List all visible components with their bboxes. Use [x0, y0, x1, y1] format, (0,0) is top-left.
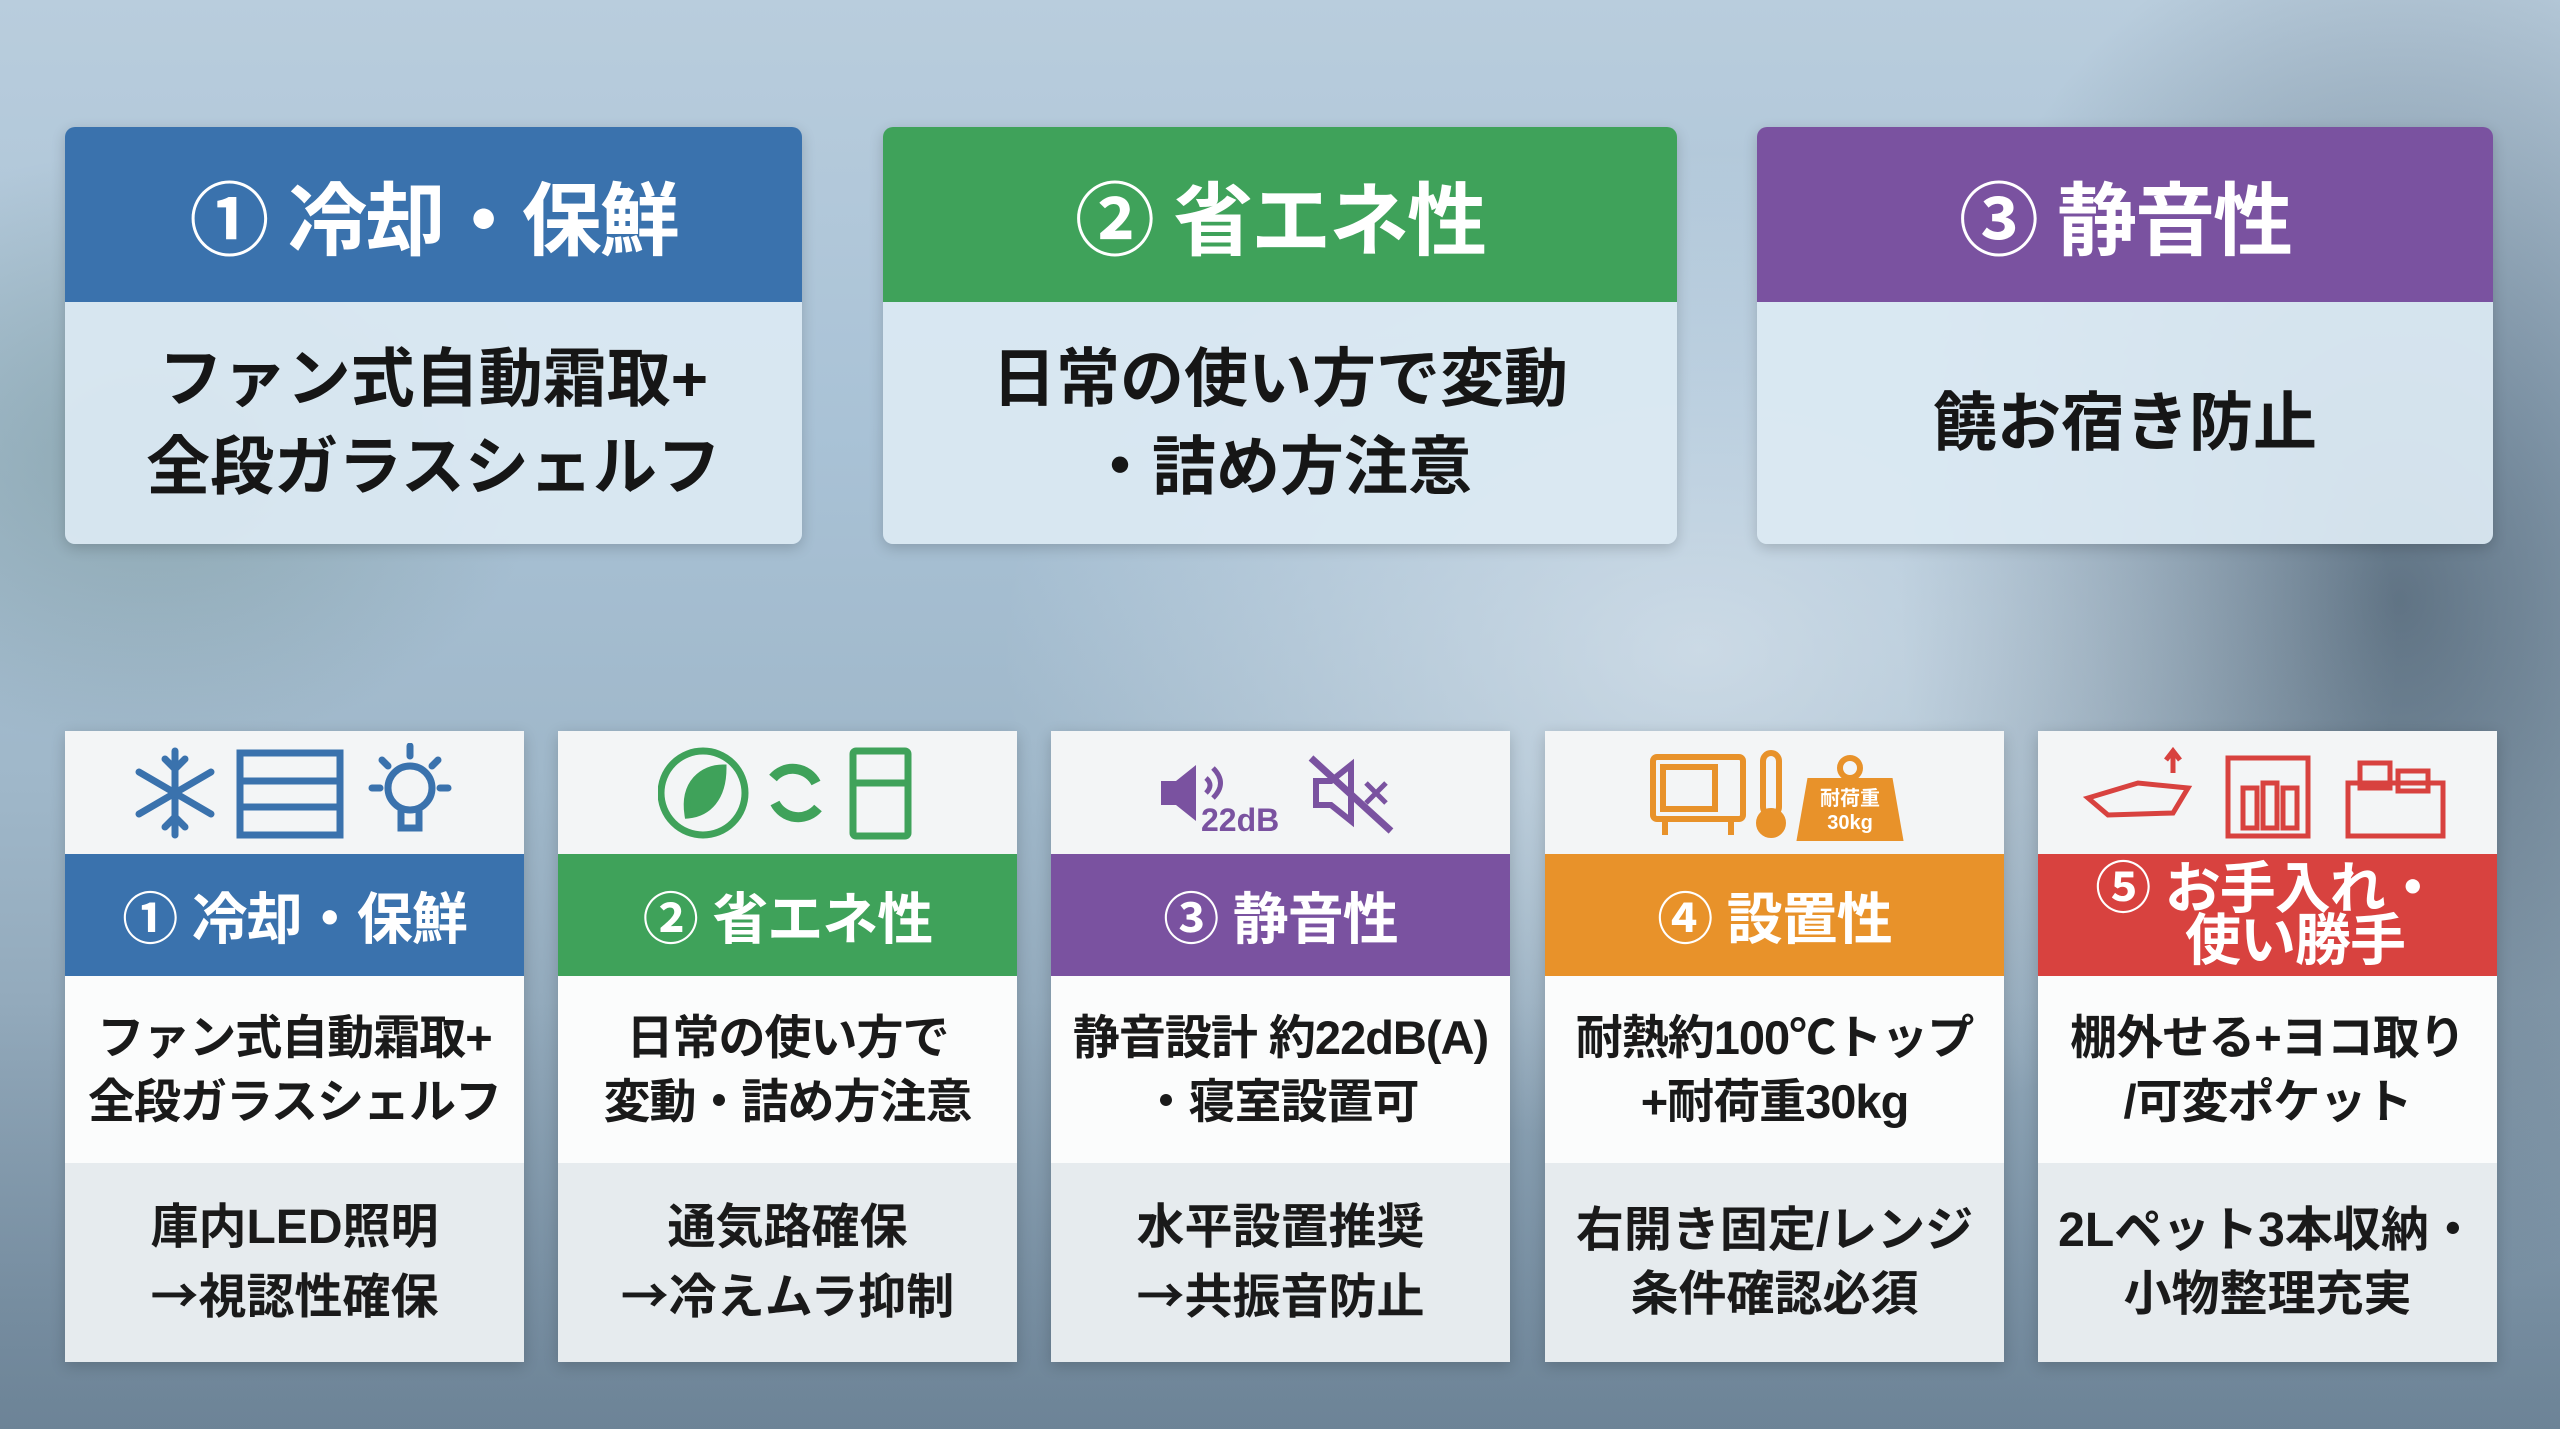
text 1: [2038, 976, 2497, 1163]
text 1: [558, 976, 1017, 1163]
text block: [883, 302, 1677, 544]
heading: ④ 設置性: [1657, 888, 1892, 950]
heading: 使い勝手: [2185, 909, 2405, 972]
text 2: 水平設置推奨: [1136, 1200, 1424, 1254]
text 2: 2Lペット3本収納・: [2058, 1204, 2477, 1256]
heading: [65, 854, 524, 976]
heading: ① 冷却・保鮮: [122, 888, 467, 950]
heading: ⑤ お手入れ・: [2095, 857, 2440, 920]
text 1: ・寝室設置可: [1142, 1074, 1418, 1128]
text 1: [1545, 976, 2004, 1163]
heading: ③ 静音性: [1163, 888, 1398, 950]
heading: 静音性: ③ 静音性: [1959, 176, 2291, 266]
panel: bottom card 1: [65, 731, 524, 1362]
text 2: 条件確認必須: [1630, 1268, 1918, 1320]
text 1: [65, 976, 524, 1163]
text 2: [558, 1163, 1017, 1362]
text 1: 全段ガラスシェルフ: [88, 1074, 501, 1128]
panel: bottom card 4: [1545, 731, 2004, 1362]
text block: 日常の使い方で変動: [992, 343, 1568, 415]
text block: 全段ガラスシェルフ: [146, 431, 721, 503]
text 2: [2038, 1163, 2497, 1362]
icons: microwave thermometer weight: 30kg: [1827, 812, 1872, 834]
text 2: [65, 1163, 524, 1362]
text 2: 小物整理充実: [2123, 1268, 2412, 1320]
text 1: 棚外せる+ヨコ取り: [2070, 1010, 2465, 1064]
text 1: +耐荷重30kg: [1641, 1074, 1908, 1128]
text 1: /可変ポケット: [2123, 1074, 2412, 1128]
icons: speaker 22dB mute: [1051, 731, 1510, 854]
panel: top card 2: [883, 127, 1677, 544]
panel: bottom card 2: [558, 731, 1017, 1362]
heading: 省エネ性: ② 省エネ性: [1075, 176, 1485, 266]
panel: top card 1: [65, 127, 802, 544]
text 1: 日常の使い方で: [626, 1010, 948, 1064]
icons: shelf hand bottles box: [2038, 731, 2497, 854]
text 2: 庫内LED照明: [150, 1200, 438, 1254]
heading: ② 省エネ性: [643, 888, 932, 950]
text block: [65, 302, 802, 544]
text 1: 変動・詰め方注意: [604, 1074, 972, 1128]
heading: [1545, 854, 2004, 976]
text 2: [1051, 1163, 1510, 1362]
text 2: →共振音防止: [1136, 1256, 1425, 1326]
text 1: [1051, 976, 1510, 1163]
text 2: →冷えムラ抑制: [621, 1256, 954, 1326]
panel: bottom card 5: [2038, 731, 2497, 1362]
heading: [558, 854, 1017, 976]
text 1: 静音設計 約22dB(A): [1073, 1010, 1488, 1064]
icons: microwave thermometer weight: 耐荷重: [1820, 786, 1880, 810]
heading: 静音性: [1757, 127, 2493, 302]
heading: [2038, 854, 2497, 976]
icons: microwave thermometer weight: [1545, 731, 2004, 854]
text 2: [1545, 1163, 2004, 1362]
heading: [1051, 854, 1510, 976]
text 2: 通気路確保: [667, 1200, 908, 1254]
text 2: 右開き固定/レンジ: [1576, 1204, 1973, 1256]
icons: snowflake shelf bulb: [65, 731, 524, 854]
panel: bottom card 3: [1051, 731, 1510, 1362]
text 2: →視認性確保: [150, 1256, 439, 1326]
icons: leaf cycle fridge: [558, 731, 1017, 854]
text 1: ファン式自動霜取+: [97, 1010, 492, 1064]
text 1: 耐熱約100℃トップ: [1576, 1010, 1973, 1064]
text block: [1757, 302, 2493, 544]
text block: 饒お宿き防止: [1933, 387, 2317, 459]
heading: 省エネ性: [883, 127, 1677, 302]
icons: speaker 22dB mute: 22dB: [1200, 802, 1279, 838]
panel: top card 3: [1757, 127, 2493, 544]
text block: ・詰め方注意: [1088, 431, 1472, 503]
heading: 冷却・保鮮: [65, 127, 802, 302]
text block: ファン式自動霜取+: [159, 343, 708, 415]
heading: 冷却・保鮮: ① 冷却・保鮮: [189, 176, 678, 266]
